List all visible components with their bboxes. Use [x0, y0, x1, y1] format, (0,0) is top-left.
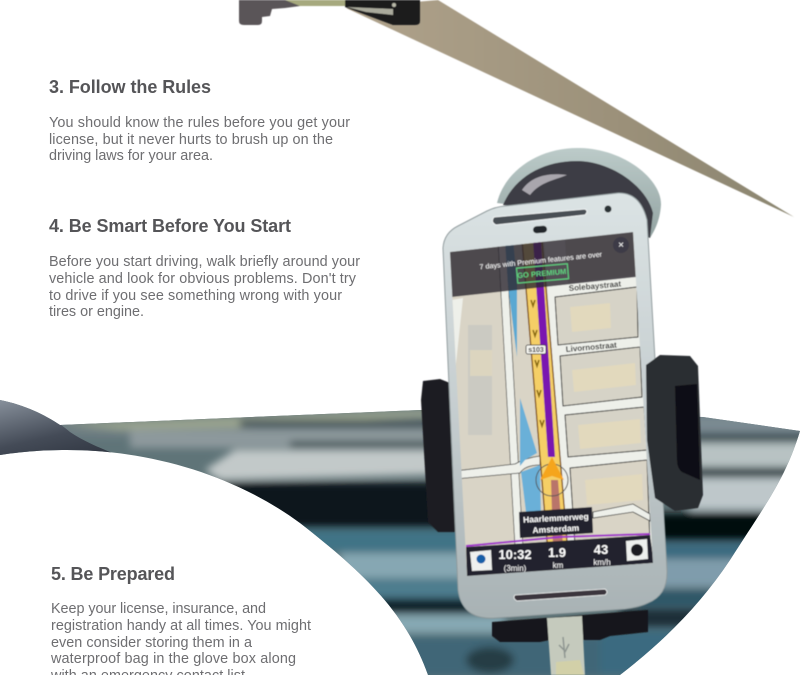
right of phone bands: [690, 415, 800, 434]
purple route line: [466, 534, 650, 546]
body text: driving laws for your area.: [49, 148, 213, 164]
body text: license, but it never hurts to brush up on the: [49, 132, 333, 148]
body text: [49, 254, 360, 320]
body text: Before you start driving, walk briefly around your: [49, 254, 360, 270]
body text: to drive if you see something wrong with your: [49, 288, 342, 304]
bottom status bar: (3min): [504, 564, 527, 573]
bottom status bar: 1.9: [548, 545, 566, 560]
body text: tires or engine.: [49, 304, 144, 320]
body text: even consider storing them in a: [51, 635, 252, 651]
address label: [519, 507, 593, 538]
section 3 text: [49, 77, 350, 164]
premium banner: [448, 231, 636, 297]
suction cup: [497, 148, 661, 238]
left of phone bands: [26, 408, 414, 438]
bottom status bar: km: [553, 561, 564, 570]
section 5 text: [50, 564, 311, 675]
heading: be smart: 4. Be Smart Before You Start: [49, 216, 291, 236]
top cropped object: [239, 0, 420, 25]
highway and route: [522, 240, 569, 565]
map label: Livornostraat: Livornostraat: [565, 341, 617, 354]
left bracket arm: [421, 379, 456, 532]
bottom bracket: [492, 610, 648, 642]
map label: road number: [526, 345, 546, 354]
bottom status bar: 43: [594, 542, 608, 557]
body text: [50, 601, 311, 675]
body text: registration handy at all times. You might: [51, 618, 311, 634]
section 4 text: [49, 216, 360, 320]
map roads and blocks: [452, 240, 652, 547]
body text: You should know the rules before you get your: [49, 115, 350, 131]
map label: road number: s103: [528, 347, 544, 354]
right bracket arm: [646, 355, 703, 511]
premium banner: ×: [618, 240, 624, 251]
bottom status bar: [466, 535, 654, 577]
heading: follow the rules: 3. Follow the Rules: [49, 77, 211, 97]
body text: waterproof bag in the glove box along: [50, 651, 296, 667]
premium banner: GO PREMIUM: [517, 267, 567, 280]
steering wheel: [0, 400, 111, 455]
heading: be prepared: 5. Be Prepared: [51, 564, 175, 584]
navigation screen: [450, 232, 654, 576]
phone mount with navigation phone: [421, 148, 703, 675]
body text: vehicle and look for obvious problems. Don't try: [49, 271, 357, 287]
map label: Solebaystraat: Solebaystraat: [568, 279, 622, 293]
top wedge: [346, 0, 794, 217]
body text: [49, 115, 350, 164]
body text: Keep your license, insurance, and: [51, 601, 266, 617]
address label: Haarlemmerweg: [523, 511, 589, 525]
position arrow: [536, 457, 568, 496]
premium banner: 7 days with Premium features are over: [479, 250, 603, 271]
background dashboard photo: [0, 395, 800, 675]
home button: [514, 589, 607, 601]
river: [505, 240, 541, 520]
address label: Amsterdam: [532, 523, 580, 535]
bottom status bar: 10:32: [498, 547, 532, 562]
usb cable: [547, 616, 585, 675]
bottom status bar: km/h: [593, 558, 611, 567]
phone body: [443, 193, 667, 618]
speaker and camera: [492, 206, 612, 233]
